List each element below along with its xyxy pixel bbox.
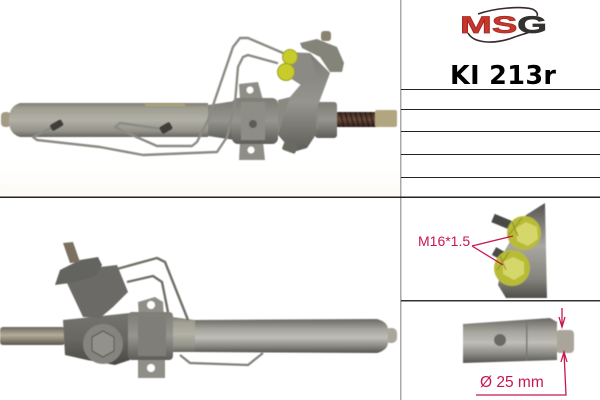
thread detail photo [493, 203, 547, 298]
yellow port plugs [278, 50, 298, 80]
hex plug [83, 324, 123, 364]
photo: bottom view of steering rack [0, 242, 397, 378]
lower yellow plug [494, 250, 530, 286]
valve housing and dust cap [278, 31, 344, 154]
mounting clamp [128, 297, 173, 378]
thread size callout [418, 233, 513, 265]
diameter label: Ø 25 mm [480, 374, 544, 391]
main cylinder tube [172, 317, 397, 353]
fuel pipe stubs [493, 218, 510, 256]
rack shaft with thread [315, 102, 397, 138]
pipe fittings on tube [49, 119, 173, 134]
hydraulic pipes [33, 38, 283, 155]
end diameter detail photo [463, 318, 574, 363]
valve housing and cap [55, 242, 128, 318]
diameter dimension arrows [476, 308, 567, 395]
mounting clamp [232, 82, 278, 160]
housing [498, 203, 547, 298]
upper yellow plug [507, 216, 541, 250]
lower return pipe [180, 353, 263, 365]
part number: KI 213r [450, 61, 556, 91]
main cylinder tube [1, 101, 235, 140]
pipes to valve [117, 258, 188, 320]
logo swoosh [468, 8, 537, 42]
photo: top view of steering rack [0, 31, 400, 196]
thread size callout: M16*1.5 [418, 233, 470, 249]
input shaft [0, 327, 65, 345]
gear housing [63, 313, 130, 365]
logo wordmark: MS G [460, 12, 547, 39]
MSG logo [460, 8, 547, 42]
